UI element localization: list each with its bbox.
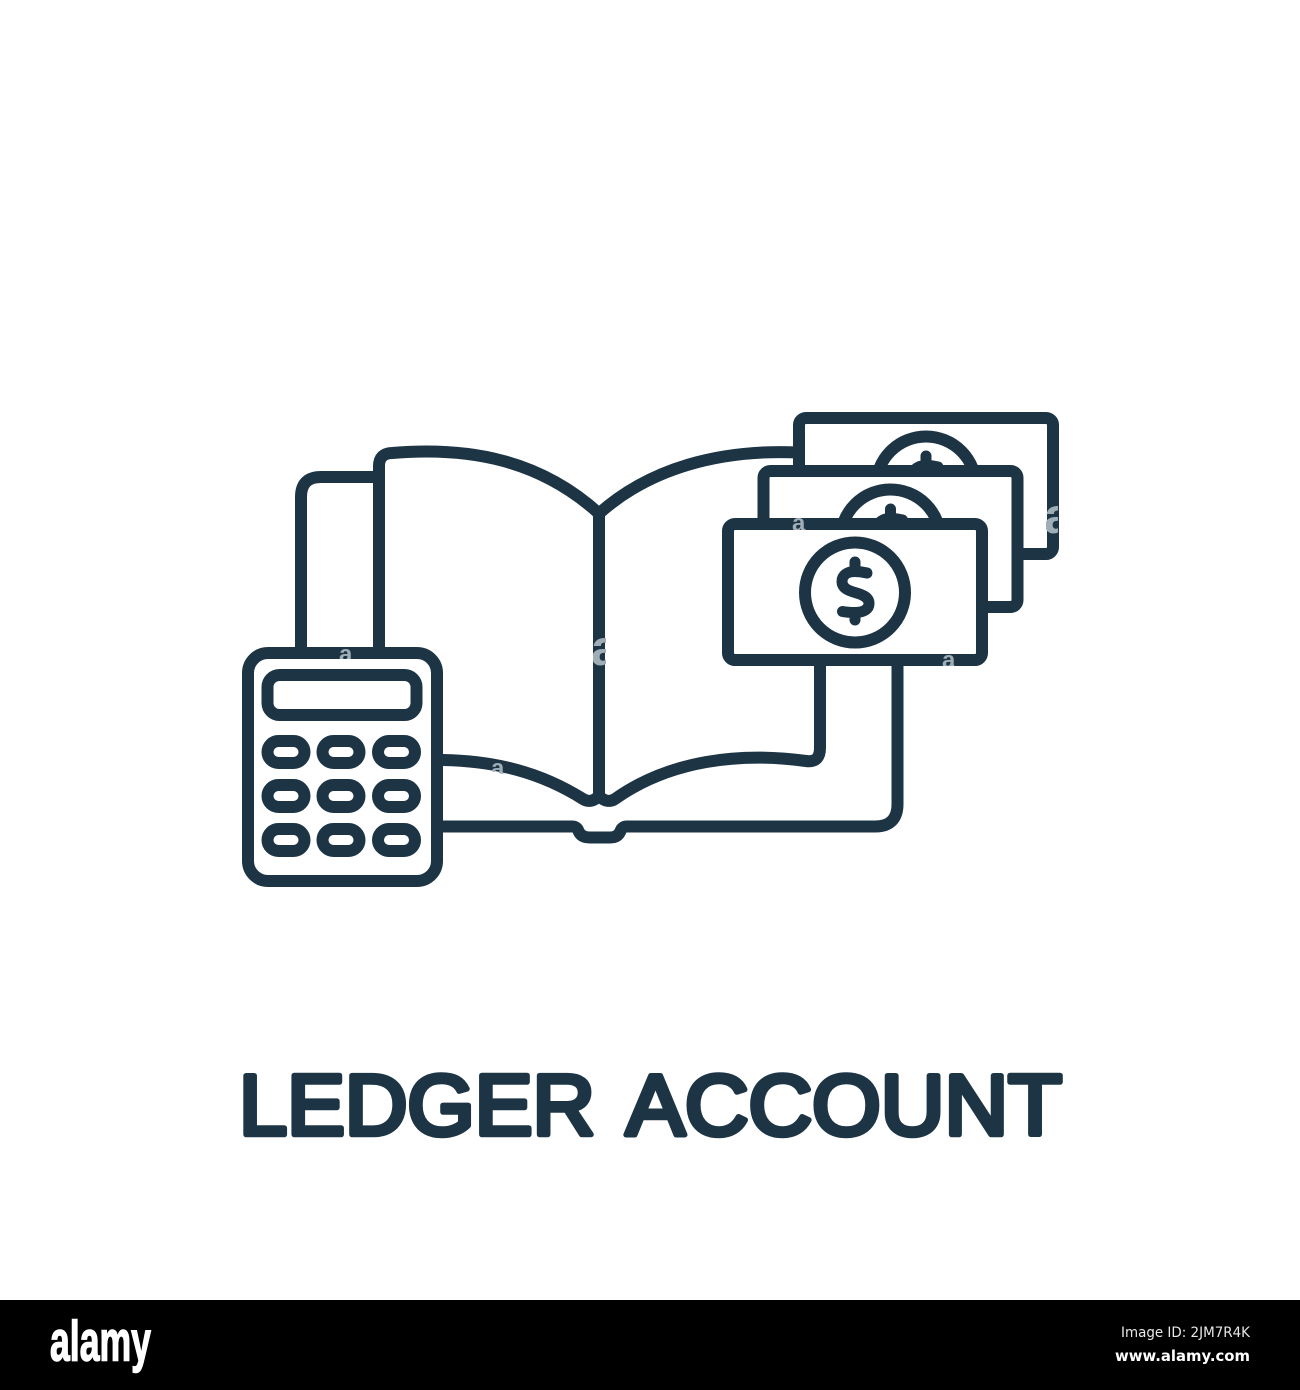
watermark fragments on the strokes (340, 506, 1058, 774)
watermark fragments on the strokes: a (339, 641, 353, 668)
website: www.alamy.com (1115, 1347, 1250, 1365)
icon: open ledger book (301, 451, 898, 838)
calculator keypad (268, 741, 415, 851)
title word: account: ACCOUNT (626, 1058, 1062, 1154)
dollar coin (805, 542, 905, 642)
watermark fragments on the strokes: a (942, 647, 956, 674)
title word: ledger: LEDGER (239, 1058, 595, 1154)
calculator body (248, 653, 437, 881)
title (239, 1058, 1062, 1154)
icon: stack of dollar bills (728, 418, 1053, 660)
watermark fragments on the strokes: a (792, 510, 806, 537)
footer bar (0, 1300, 1300, 1390)
watermark fragments on the strokes: a (1044, 488, 1073, 544)
book right page (599, 452, 820, 801)
middle banknote (764, 471, 1018, 607)
book back cover (301, 477, 898, 838)
icon: ledger account illustration (248, 418, 1053, 881)
front banknote (728, 524, 982, 660)
image id: Image ID: 2JM7R4K (1121, 1325, 1251, 1341)
watermark fragments on the strokes: a (591, 620, 620, 676)
book left page (379, 451, 599, 801)
icon: calculator (248, 653, 437, 881)
back banknote (799, 418, 1053, 554)
infographic canvas (0, 412, 1300, 1390)
watermark fragments on the strokes: a (491, 755, 505, 782)
calculator display (268, 675, 416, 715)
alamy logo: alamy (50, 1310, 151, 1374)
